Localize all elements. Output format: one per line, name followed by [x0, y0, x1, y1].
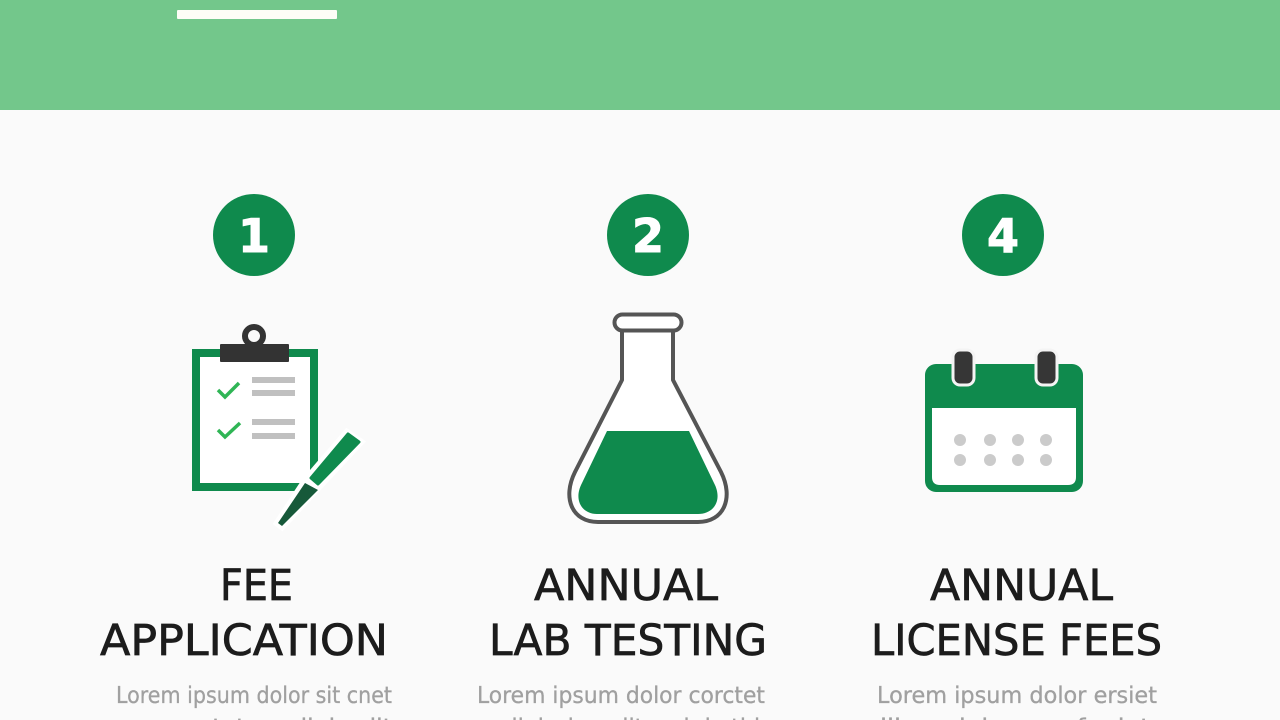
heading: annual license fees: ANNUAL — [930, 561, 1113, 611]
header band — [0, 0, 1280, 110]
heading: fee application: FEE — [220, 561, 293, 611]
icon: calendar — [925, 350, 1083, 492]
description text: Lorem ipsum dolor sit cnet — [116, 683, 392, 709]
description text: Lorem ipsum dolor ersiet — [877, 683, 1157, 709]
number badge 1 — [213, 194, 295, 276]
heading: fee application: APPLICATION — [100, 616, 388, 666]
panel: annual lab testing — [477, 194, 767, 720]
heading: annual license fees — [871, 561, 1162, 666]
description text — [877, 683, 1157, 720]
number badge 4 — [962, 194, 1044, 276]
number badge 2: 2 — [632, 209, 664, 263]
number badge 4: 4 — [987, 209, 1019, 263]
description text — [477, 683, 765, 720]
icon: flask — [569, 314, 727, 522]
description text — [116, 683, 392, 720]
icon: clipboard with pen — [196, 327, 360, 526]
heading: annual lab testing: LAB TESTING — [489, 616, 767, 666]
heading: annual lab testing: ANNUAL — [534, 561, 718, 611]
header accent bar — [177, 10, 337, 19]
description text: Lorem ipsum dolor corctet — [477, 683, 765, 709]
heading: fee application — [100, 561, 388, 666]
heading: annual lab testing — [489, 561, 767, 666]
number badge 2 — [607, 194, 689, 276]
heading: annual license fees: LICENSE FEES — [871, 616, 1162, 666]
panel: annual license fees — [871, 194, 1162, 720]
number badge 1: 1 — [238, 209, 270, 263]
panel: fee application — [100, 194, 392, 720]
